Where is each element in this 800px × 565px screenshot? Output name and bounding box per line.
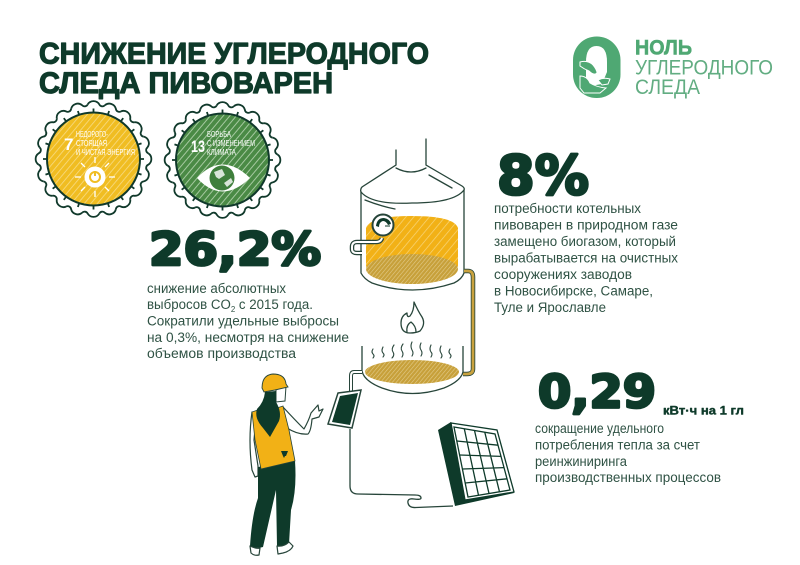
text: biogas: потребности котельных <box>494 201 641 216</box>
text: heat consumption: сокращение удельного <box>535 421 664 436</box>
badge: SDG 13: С ИЗМЕНЕНИЕМ <box>207 139 255 148</box>
lower tank outline <box>362 346 463 394</box>
text: heat consumption <box>535 421 721 485</box>
text: biogas <box>494 201 678 315</box>
worker emblem <box>281 451 288 458</box>
worker shoes <box>250 542 293 555</box>
text: emissions reduction: выбросов CO <box>147 297 232 312</box>
title <box>39 38 429 100</box>
text: biogas: сооружениях заводов <box>494 267 632 282</box>
text: emissions reduction: Сократили удельные выбросы <box>147 314 339 328</box>
stat: 26,2%: 26,2% <box>149 223 321 276</box>
worker trousers <box>250 461 296 548</box>
cable <box>350 429 453 508</box>
gauge and pipe <box>352 214 394 253</box>
text: heat consumption: потребления тепла за счет <box>535 438 700 452</box>
text: biogas: Туле и Ярославле <box>494 300 606 315</box>
icon: sun power <box>75 157 115 197</box>
pipe to tablet <box>351 372 362 391</box>
tank outline <box>361 139 464 290</box>
logo wordmark: УГЛЕРОДНОГО <box>635 56 773 80</box>
icon: flame <box>401 302 424 333</box>
title: СНИЖЕНИЕ УГЛЕРОДНОГО <box>39 38 429 70</box>
logo wordmark <box>635 36 773 99</box>
badge: SDG 13: БОРЬБА <box>207 130 231 139</box>
text: biogas: пивоварен в природном газе <box>494 218 678 232</box>
worker helmet <box>262 374 288 392</box>
text: emissions reduction: с 2015 года. <box>235 297 313 312</box>
logo wordmark: СЛЕДА <box>635 76 700 99</box>
stat: 0,29: 0,29 <box>538 366 656 418</box>
text: emissions reduction: на 0,3%, несмотря на снижение <box>147 330 349 345</box>
steam <box>372 342 451 358</box>
liquid in lower tank <box>365 360 459 384</box>
text: biogas: замещено биогазом, который <box>494 234 676 249</box>
text: heat consumption: реинжиниринга <box>535 454 627 469</box>
text: emissions reduction: снижение абсолютных <box>147 281 286 296</box>
badge: SDG 13: КЛИМАТА <box>207 148 237 157</box>
gold connecting pipe <box>463 271 473 374</box>
logo: zero carbon footprint <box>573 36 773 99</box>
worker hair <box>256 391 280 437</box>
tablet <box>328 390 361 428</box>
brewing kettle: upper tank <box>352 139 464 290</box>
liquid in tank <box>366 216 458 284</box>
badge: SDG 13: 13 <box>191 137 205 156</box>
text: biogas: в Новосибирске, Самаре, <box>494 284 653 298</box>
logo wordmark: НОЛЬ <box>635 36 692 60</box>
logo mark <box>573 36 620 98</box>
text: emissions reduction <box>147 281 349 361</box>
text: biogas: вырабатывается на очистных <box>494 250 678 266</box>
stat: 8%: 8% <box>497 144 589 207</box>
badge: SDG 7: НЕДОРОГО- <box>76 130 108 139</box>
badge: SDG 7: 7 <box>64 135 73 154</box>
text: emissions reduction: 2 <box>231 305 236 314</box>
text: emissions reduction: объемов производства <box>147 346 297 361</box>
badge: SDG 13 <box>164 101 281 219</box>
title: СЛЕДА ПИВОВАРЕН <box>39 67 333 100</box>
solar panel <box>438 422 514 506</box>
worker head <box>276 386 286 402</box>
badge: SDG 7: И ЧИСТАЯ ЭНЕРГИЯ <box>76 148 135 157</box>
brewing kettle: lower tank <box>362 346 463 394</box>
icon: eye with globe <box>197 164 250 192</box>
badge: SDG 7 <box>35 100 152 218</box>
text: heat consumption: производственных процессов <box>535 470 721 485</box>
unit: kWh per hl: кВт·ч на 1 гл <box>663 406 744 418</box>
worker vest <box>252 406 295 469</box>
worker arms <box>250 405 323 477</box>
badge: SDG 7: СТОЯЩАЯ <box>76 139 107 148</box>
worker figure <box>250 374 323 555</box>
